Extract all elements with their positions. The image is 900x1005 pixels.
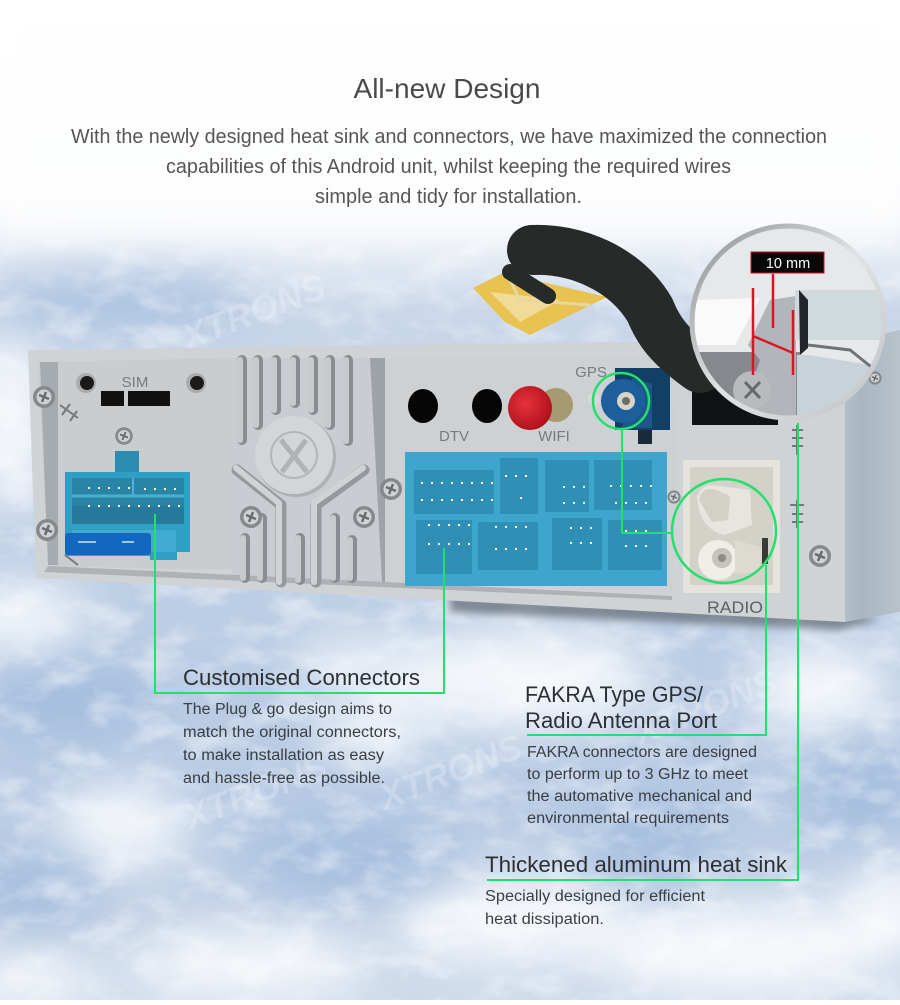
port labels: SIM	[122, 374, 148, 391]
callout: heat sink	[485, 852, 788, 928]
wifi antenna connector	[508, 386, 573, 430]
left blue connector	[65, 451, 190, 560]
screw direction icons	[60, 404, 804, 565]
callout: fakra antenna port: FAKRA connectors are designed	[527, 744, 757, 761]
fakra gps connector	[588, 368, 670, 444]
callout: fakra antenna port	[525, 682, 757, 827]
background: snowy sky	[0, 220, 900, 1000]
callout: heat sink: Specially designed for efficient	[485, 888, 706, 905]
callout: customised connectors: Customised Connectors	[183, 665, 420, 690]
watermark: xtrons: XTRONS	[371, 725, 528, 818]
green callout lines	[155, 373, 798, 880]
callout: heat sink: heat dissipation.	[485, 911, 604, 928]
intro paragraph: simple and tidy for installation.	[315, 186, 582, 208]
intro paragraph: capabilities of this Android unit, whilst keeping the required wires	[166, 156, 731, 178]
main blue connector block	[405, 452, 667, 586]
device side panel	[835, 330, 900, 622]
port labels: WIFI	[538, 428, 570, 445]
callout: customised connectors: to make installation as easy	[183, 747, 384, 764]
label: radio: RADIO	[707, 598, 763, 617]
black fleece cable	[510, 250, 700, 368]
callout: customised connectors: The Plug & go design aims to	[183, 701, 392, 718]
screws	[33, 371, 882, 567]
callout: fakra antenna port: Radio Antenna Port	[525, 708, 717, 733]
device: head unit rear	[28, 330, 900, 630]
watermark: xtrons: XTRONS	[174, 265, 331, 358]
callout: fakra antenna port: to perform up to 3 GHz to meet	[527, 766, 749, 783]
callout: customised connectors: and hassle-free as possible.	[183, 770, 385, 787]
radio antenna port housing	[683, 460, 780, 593]
port labels: GPS	[575, 364, 607, 381]
dimension label: 10 mm	[751, 252, 824, 273]
intro paragraph: With the newly designed heat sink and connectors, we have maximized the connection	[71, 126, 827, 148]
title: All-new Design	[354, 73, 540, 104]
callout: customised connectors	[183, 665, 420, 787]
port labels: DTV	[439, 428, 469, 445]
intro paragraph	[71, 126, 827, 208]
heat sink logo disc	[255, 416, 336, 497]
callout: fakra antenna port: the automative mechanical and	[527, 788, 752, 805]
port labels	[122, 364, 607, 445]
callout: heat sink: Thickened aluminum heat sink	[485, 852, 788, 877]
heat sink fins	[236, 360, 364, 582]
watermark: xtrons: XTRONS	[176, 745, 333, 838]
watermark: xtrons: XTRONS	[626, 660, 783, 753]
dimension label: 10 mm: 10 mm	[766, 256, 810, 272]
callout: fakra antenna port: environmental requirements	[527, 810, 729, 827]
dtv holes	[408, 389, 502, 423]
yellow wiring plug	[473, 270, 607, 335]
magnifier inset	[690, 225, 886, 420]
watermark: xtrons	[174, 265, 783, 838]
callout: customised connectors: match the original connectors,	[183, 724, 401, 741]
dark slot	[692, 375, 778, 425]
callout: fakra antenna port: FAKRA Type GPS/	[525, 682, 704, 707]
dimension lines	[753, 274, 793, 375]
sim panel	[76, 373, 206, 406]
